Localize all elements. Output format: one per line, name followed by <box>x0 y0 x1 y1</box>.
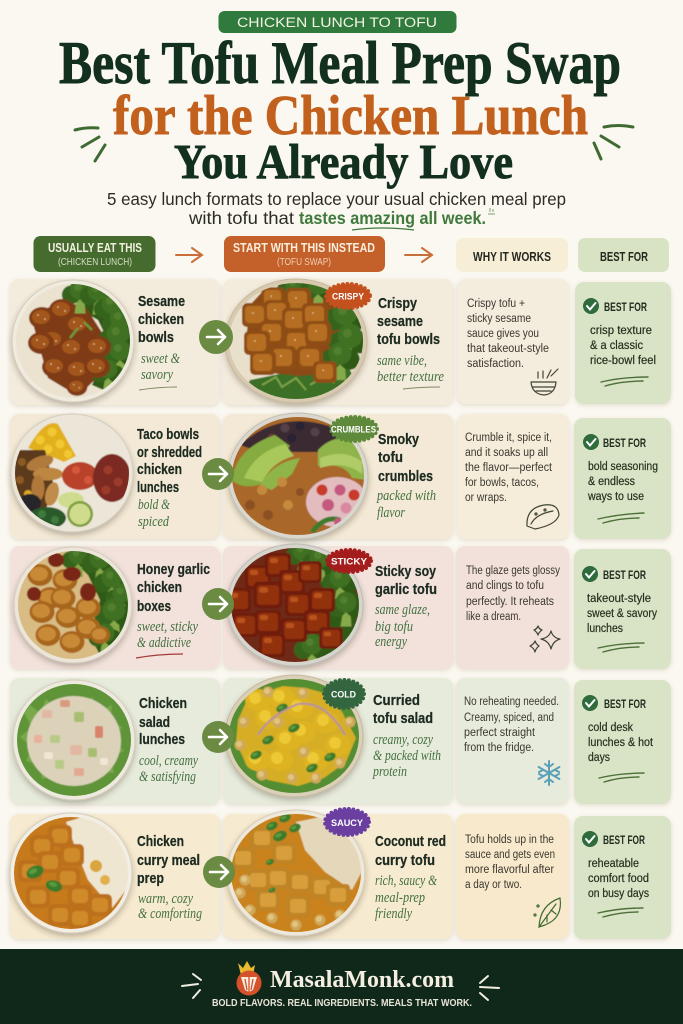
bowl: crispy sesame tofu <box>225 274 371 403</box>
why text: like a dream. <box>466 611 521 623</box>
title: You Already Love <box>174 134 513 189</box>
badge: crispy <box>326 284 370 308</box>
title accent strokes: left <box>75 128 105 161</box>
tagline: same vibe better texture <box>377 353 444 389</box>
why text: sauce gives you <box>467 328 539 340</box>
best for block: days <box>588 752 610 764</box>
best for block: lunches <box>587 623 623 635</box>
best for block: on busy days <box>588 888 649 900</box>
best for block: lunches & hot <box>588 737 654 749</box>
tagline: creamy cozy packed: creamy, cozy <box>373 732 433 748</box>
best for block <box>582 695 654 782</box>
column header: start with this instead: (TOFU SWAP) <box>277 257 331 268</box>
title: chicken curry meal prep: curry meal <box>137 852 200 869</box>
column header: why it works <box>456 238 568 272</box>
arrow: row 1 <box>199 320 233 354</box>
panel: best for <box>574 680 671 804</box>
title: taco bowls: chicken <box>137 461 182 478</box>
tagline: bold and spiced <box>138 497 170 530</box>
title: sticky soy garlic tofu: garlic tofu <box>375 581 437 598</box>
arrow: header one <box>176 248 202 262</box>
why text: sticky sesame <box>467 313 531 325</box>
subtitle: 5 easy lunch formats to replace your usual chicken meal prep <box>107 189 566 209</box>
icon: logo <box>236 961 262 996</box>
title: sticky soy garlic tofu: Sticky soy <box>375 563 437 580</box>
bowl: smoky tofu crumbles <box>228 413 368 539</box>
title: honey garlic chicken boxes: Honey garlic <box>137 561 210 578</box>
brand name: MasalaMonk.com <box>270 967 454 993</box>
tagline: cool creamy satisfying <box>139 753 198 785</box>
tagline: warm cozy comforting: warm, cozy <box>138 891 193 907</box>
why text: No reheating needed. <box>464 696 559 708</box>
title: taco bowls: or shredded <box>137 444 202 461</box>
tagline: rich saucy friendly: rich, saucy & <box>375 873 437 889</box>
why text: from the fridge. <box>464 742 534 754</box>
why text: that takeout-style <box>467 343 549 355</box>
title: smoky tofu crumbles: Smoky <box>378 431 420 448</box>
bowl: chicken curry <box>10 812 135 933</box>
best for block: rice-bowl feel <box>590 355 656 367</box>
bowl: chicken salad <box>13 680 135 800</box>
tagline: sweet and savory <box>139 351 180 390</box>
panel: best for <box>574 549 671 669</box>
best for block: BEST FOR <box>604 699 647 711</box>
panel: tofu crumble card <box>223 414 453 539</box>
tagline: bold and spiced: spiced <box>138 514 169 530</box>
arrow: row 5 <box>203 856 235 888</box>
panel: row 3 honey garlic <box>10 542 671 669</box>
title: curried tofu salad: Curried <box>373 692 420 709</box>
why text: and clings to tofu <box>466 580 544 592</box>
footer <box>0 949 683 1024</box>
badge: sticky <box>327 550 371 572</box>
badge: saucy: SAUCY <box>331 818 364 829</box>
best for block <box>583 298 656 386</box>
title: coconut red curry tofu: Coconut red <box>375 833 446 850</box>
column header: usually eat this: USUALLY EAT THIS <box>48 241 142 255</box>
why text: The glaze gets glossy <box>466 565 560 577</box>
title: honey garlic chicken boxes: boxes <box>137 598 171 615</box>
icon: leaf <box>534 898 560 927</box>
title: sticky soy garlic tofu <box>375 563 437 598</box>
why text <box>466 565 560 623</box>
tagline: rich saucy friendly: meal-prep <box>375 890 425 906</box>
title: chicken salad lunches: Chicken <box>139 695 187 712</box>
best for block: comfort food <box>588 873 649 885</box>
tagline: warm cozy comforting <box>138 891 202 922</box>
tagline: warm cozy comforting: & comforting <box>138 906 202 922</box>
why text <box>465 834 555 891</box>
title: chicken salad lunches <box>139 695 187 748</box>
panel: row 5 curry <box>10 809 671 939</box>
why text: Crispy tofu + <box>467 298 525 310</box>
title: smoky tofu crumbles: tofu <box>378 449 403 466</box>
title accent strokes: right <box>594 126 633 159</box>
category pill <box>218 11 456 33</box>
title: honey garlic chicken boxes <box>137 561 210 615</box>
title: chicken salad lunches: salad <box>139 714 170 731</box>
tagline: creamy cozy packed: protein <box>372 764 407 780</box>
panel: best for <box>574 418 671 539</box>
best for block: reheatable <box>588 858 639 870</box>
tagline: creamy cozy packed: & packed with <box>373 748 441 764</box>
panel: why it works <box>457 414 569 539</box>
subtitle: with tofu that <box>188 208 294 228</box>
why text: perfect straight <box>464 727 536 739</box>
column header: best for: BEST FOR <box>600 250 648 264</box>
bowl: sesame chicken <box>12 279 138 402</box>
tagline: packed with flavor <box>376 488 436 521</box>
why text <box>464 696 559 754</box>
tagline: same glaze big tofu energy: energy <box>375 634 407 650</box>
badge: cold: COLD <box>331 690 356 700</box>
why text: Crumble it, spice it, <box>465 432 552 444</box>
title: crispy sesame tofu bowls: Crispy <box>378 295 418 312</box>
best for block: cold desk <box>588 722 633 734</box>
column header: usually eat this: (CHICKEN LUNCH) <box>58 257 132 268</box>
title: chicken curry meal prep <box>137 833 200 887</box>
badge: crumbles: CRUMBLES <box>331 424 376 436</box>
badge: cold <box>324 680 364 708</box>
best for block: sweet & savory <box>587 608 657 620</box>
best for block <box>582 566 657 652</box>
panel: why it works <box>456 814 569 939</box>
title: coconut red curry tofu <box>375 833 446 869</box>
icon: taco <box>527 505 559 529</box>
icon: steaming bowl <box>531 369 558 395</box>
badge: sticky: STICKY <box>331 556 368 568</box>
tagline: bold and spiced: bold & <box>138 497 170 513</box>
title: chicken curry meal prep: Chicken <box>137 833 184 850</box>
tagline: sweet and savory: sweet & <box>141 351 180 367</box>
title: sesame chicken bowls: Sesame <box>138 293 185 310</box>
best for block <box>582 831 649 917</box>
best for block: & a classic <box>590 340 643 352</box>
best for block: BEST FOR <box>603 438 647 450</box>
subtitle: tastes amazing all week. <box>299 208 486 228</box>
title: crispy sesame tofu bowls: sesame <box>377 313 423 330</box>
why text <box>467 298 549 370</box>
title: crispy sesame tofu bowls <box>377 295 440 348</box>
panel: row 1 sesame <box>10 274 671 405</box>
title: smoky tofu crumbles <box>378 431 433 485</box>
tagline: rich saucy friendly <box>375 873 437 922</box>
title: taco bowls <box>137 426 202 496</box>
panel: row 2 taco <box>10 413 671 539</box>
why text: Tofu holds up in the <box>465 834 554 846</box>
tagline: cool creamy satisfying: cool, creamy <box>139 753 198 769</box>
panel: chicken curry card <box>10 814 220 939</box>
panel: honey garlic chicken card <box>10 546 220 669</box>
arrow: row 4 <box>202 721 234 753</box>
tagline: sweet sticky addictive <box>136 619 198 658</box>
best for block: bold seasoning <box>588 461 658 473</box>
title: curried tofu salad <box>373 692 433 727</box>
tagline: same glaze big tofu energy: same glaze, <box>375 602 430 618</box>
column header: usually eat this <box>34 236 156 272</box>
tagline: sweet sticky addictive: sweet, sticky <box>137 619 198 635</box>
bowl: coconut red curry tofu <box>227 810 368 936</box>
title: crispy sesame tofu bowls: tofu bowls <box>377 331 440 348</box>
column header: start with this instead: START WITH THIS INSTEAD <box>233 241 375 255</box>
arrow: row 2 <box>202 458 234 490</box>
why text: perfectly. It reheats <box>466 596 554 608</box>
panel: best for <box>574 816 671 939</box>
bowl: taco <box>11 414 133 532</box>
badge: saucy <box>325 809 369 835</box>
tagline: sweet and savory: savory <box>141 367 173 383</box>
why text: for bowls, tacos, <box>465 477 539 489</box>
why text: the flavor—perfect <box>465 462 553 474</box>
title: chicken salad lunches: lunches <box>139 731 185 748</box>
bowl: curried tofu salad <box>225 675 363 797</box>
why text: Creamy, spiced, and <box>464 712 554 724</box>
panel: curried tofu card <box>223 678 453 804</box>
best for block: BEST FOR <box>604 302 648 314</box>
badge: crispy: CRISPY <box>332 292 365 302</box>
panel: sticky tofu card <box>223 546 453 669</box>
badge: crumbles <box>331 417 377 441</box>
panel: coconut tofu card <box>223 814 453 939</box>
best for block: ways to use <box>587 491 644 503</box>
best for block: BEST FOR <box>603 570 647 582</box>
arrow: header two <box>405 248 432 262</box>
tagline: packed with flavor: packed with <box>376 488 436 504</box>
title: curried tofu salad: tofu salad <box>373 710 433 727</box>
bowl: honey garlic chicken <box>14 546 138 663</box>
icon: sparkles <box>530 626 560 652</box>
title: sesame chicken bowls: chicken <box>138 311 184 328</box>
why text <box>465 432 553 504</box>
tagline: same glaze big tofu energy: big tofu <box>375 619 413 635</box>
title: honey garlic chicken boxes: chicken <box>137 579 182 596</box>
title: sesame chicken bowls: bowls <box>138 329 174 346</box>
tagline: creamy cozy packed <box>372 732 441 780</box>
title: coconut red curry tofu: curry tofu <box>375 852 435 869</box>
column header: start with this instead <box>224 236 385 272</box>
panel: why it works <box>456 678 569 804</box>
why text: sauce and gets even <box>465 849 555 861</box>
tagline: BOLD FLAVORS. REAL INGREDIENTS. MEALS THAT WORK. <box>212 997 472 1009</box>
title: sesame chicken bowls <box>138 293 185 346</box>
tagline: same glaze big tofu energy <box>375 602 430 650</box>
best for block: crisp texture <box>590 325 652 337</box>
panel: chicken sesame bowl card <box>10 279 220 405</box>
column header: why it works: WHY IT WORKS <box>473 250 551 264</box>
arrow: row 3 <box>202 588 234 620</box>
footer sparks right <box>480 976 499 1000</box>
title: taco bowls: lunches <box>137 479 179 496</box>
panel: tofu sesame bowl card <box>223 279 453 405</box>
panel: chicken taco card <box>10 414 220 539</box>
category pill: CHICKEN LUNCH TO TOFU <box>237 15 437 30</box>
title: taco bowls: Taco bowls <box>137 426 199 443</box>
best for block: BEST FOR <box>603 835 646 847</box>
title: for the Chicken Lunch <box>113 85 588 147</box>
why text: or wraps. <box>465 492 507 504</box>
icon: snowflake <box>539 761 559 785</box>
best for block <box>583 434 658 523</box>
why text: more flavorful after <box>465 864 554 876</box>
why text: satisfaction. <box>467 358 524 370</box>
panel: best for <box>575 282 671 404</box>
tagline: rich saucy friendly: friendly <box>375 906 412 922</box>
panel: chicken salad card <box>10 678 220 804</box>
best for block: takeout-style <box>587 593 651 605</box>
title <box>59 30 621 189</box>
footer sparks left <box>182 974 201 998</box>
bowl: sticky soy garlic tofu <box>225 542 364 668</box>
tagline: same vibe better texture: better texture <box>377 369 444 385</box>
why text: a day or two. <box>465 879 522 891</box>
panel: why it works <box>456 546 569 669</box>
best for block: & endless <box>588 476 635 488</box>
tagline: cool creamy satisfying: & satisfying <box>139 769 196 785</box>
panel: row 4 salad <box>10 675 671 804</box>
why text: and it soaks up all <box>465 447 548 459</box>
panel: why it works <box>457 279 569 404</box>
tagline: packed with flavor: flavor <box>377 505 405 521</box>
column header: best for <box>578 238 669 272</box>
subtitle <box>107 189 566 230</box>
tagline: same vibe better texture: same vibe, <box>377 353 427 369</box>
title: smoky tofu crumbles: crumbles <box>378 468 433 485</box>
tagline: sweet sticky addictive: & addictive <box>137 635 191 651</box>
title: chicken curry meal prep: prep <box>137 870 164 887</box>
